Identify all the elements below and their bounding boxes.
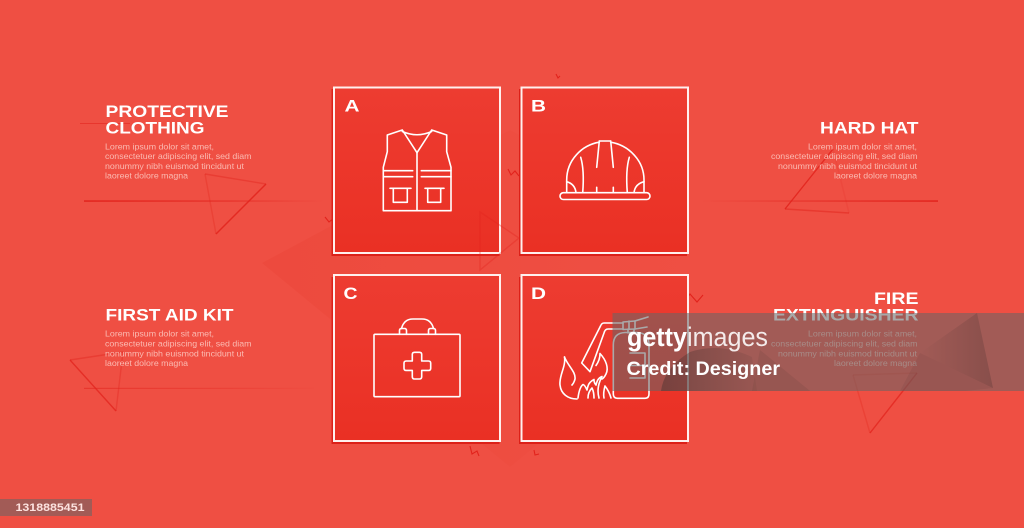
centre triangle [480, 212, 519, 270]
letter A: A [344, 96, 360, 116]
text block: hard hat: laoreet dolore magna [834, 170, 917, 180]
text block: first aid kit: laoreet dolore magna [105, 358, 188, 368]
text block: first aid kit: Lorem ipsum dolor sit amet, [105, 329, 214, 339]
text block: fire extinguisher [771, 289, 918, 368]
panel shadows [332, 89, 687, 444]
text block: protective clothing: consectetuer adipiscing elit, sed diam [105, 151, 252, 161]
text block: first aid kit: FIRST AID KIT [106, 306, 234, 324]
text block: fire extinguisher: EXTINGUISHER [773, 306, 918, 324]
icon: safety vest [383, 130, 451, 211]
background diamond [262, 130, 757, 467]
letter C: C [344, 284, 358, 303]
text block: first aid kit: nonummy nibh euismod tincidunt ut [105, 348, 245, 358]
panel A: protective clothing [334, 88, 500, 253]
text block: hard hat: nonummy nibh euismod tincidunt ut [778, 161, 918, 171]
image id badge [0, 499, 92, 516]
text block: first aid kit: consectetuer adipiscing elit, sed diam [105, 338, 252, 348]
text block: fire extinguisher: nonummy nibh euismod tincidunt ut [778, 348, 918, 358]
text block: hard hat: HARD HAT [820, 118, 919, 137]
text block: first aid kit [105, 306, 252, 368]
watermark logo: images [687, 322, 768, 352]
watermark logo [627, 322, 768, 352]
text block: hard hat: Lorem ipsum dolor sit amet, [808, 142, 917, 152]
icon: fire extinguisher [560, 317, 649, 399]
icon: hard hat [560, 141, 650, 200]
text block: fire extinguisher: laoreet dolore magna [834, 358, 917, 368]
watermark band [612, 313, 1024, 391]
text block: protective clothing: CLOTHING [106, 118, 204, 138]
panel D: fire extinguisher [522, 275, 688, 441]
letter D: D [531, 284, 546, 303]
text block: fire extinguisher: consectetuer adipiscing elit, sed diam [771, 338, 918, 348]
text block: protective clothing: nonummy nibh euismod tincidunt ut [105, 161, 245, 171]
letter B: B [531, 96, 546, 116]
panel B: hard hat [522, 88, 688, 253]
text block: fire extinguisher: FIRE [874, 289, 918, 308]
watermark credit: Credit: Designer [626, 358, 780, 380]
text block: fire extinguisher: Lorem ipsum dolor sit amet, [808, 329, 917, 339]
text block: hard hat [771, 118, 919, 180]
decorative lines and triangles [70, 74, 938, 456]
text block: protective clothing [105, 102, 252, 180]
icon: first aid kit [374, 319, 460, 397]
text block: hard hat: consectetuer adipiscing elit, sed diam [771, 151, 918, 161]
panel C: first aid kit [334, 275, 500, 441]
watermark logo: getty [627, 322, 687, 352]
text block: protective clothing: Lorem ipsum dolor sit amet, [105, 142, 214, 152]
text block: protective clothing: PROTECTIVE [106, 102, 228, 121]
image id badge: 1318885451 [16, 502, 84, 514]
text block: protective clothing: laoreet dolore magna [105, 170, 188, 180]
